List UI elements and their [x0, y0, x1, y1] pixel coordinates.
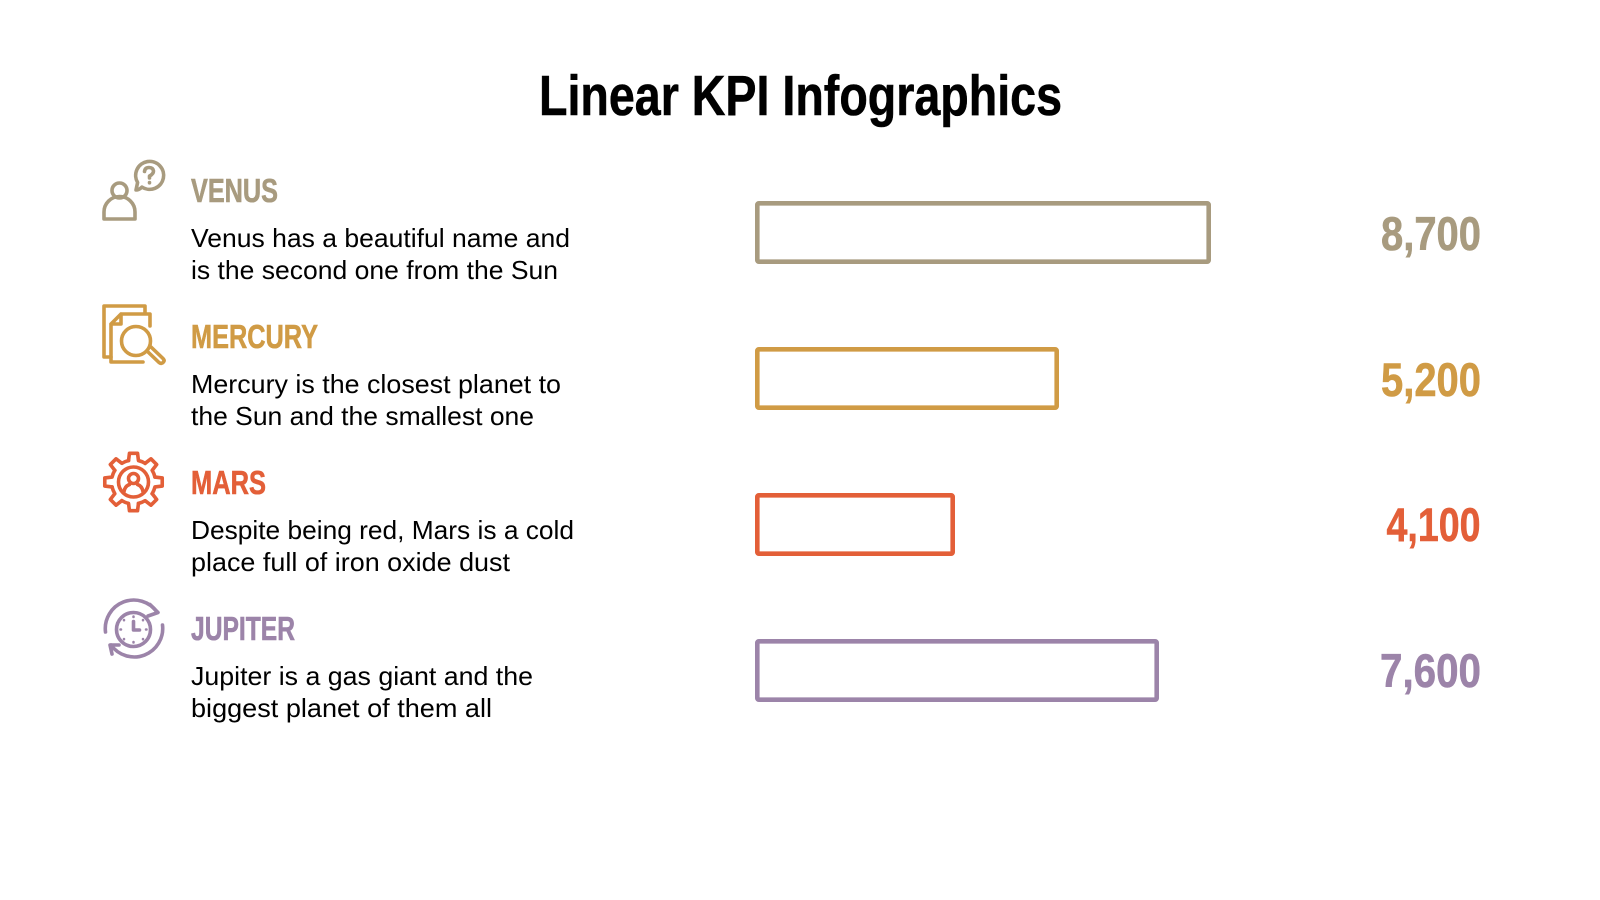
text: Mars description: Despite being red, Mars is a cold [191, 515, 574, 545]
heading: Mars: MARS [191, 464, 266, 501]
value: Mercury: 5,200 [1381, 353, 1481, 406]
icon: clock with circular arrows [105, 600, 163, 657]
panel: Mercury row [104, 306, 1481, 431]
value: Mars: 4,100 [1386, 498, 1480, 551]
panel: Venus row [104, 161, 1481, 285]
panel: Jupiter row [105, 600, 1481, 723]
title: Linear KPI Infographics [539, 64, 1062, 128]
value: Jupiter: 7,600 [1380, 644, 1481, 697]
heading: Mercury: MERCURY [191, 318, 318, 355]
text: Mercury description: the Sun and the smallest one [191, 401, 534, 431]
bar: Mars [757, 495, 953, 554]
value: Venus: 8,700 [1381, 207, 1481, 260]
bar: Venus [757, 203, 1209, 262]
text: Venus description: is the second one from the Sun [191, 255, 558, 285]
icon: gear with person [105, 453, 162, 511]
text: Mercury description: Mercury is the closest planet to [191, 369, 561, 399]
bar: Mercury [757, 349, 1057, 408]
text: Venus description: Venus has a beautiful name and [191, 223, 570, 253]
text: Jupiter description: biggest planet of them all [191, 693, 492, 723]
icon: person with question bubble [104, 161, 164, 219]
panel: Mars row [105, 453, 1480, 577]
icon: documents with magnifier [104, 306, 164, 363]
heading: Jupiter: JUPITER [191, 610, 295, 647]
bar: Jupiter [757, 641, 1157, 700]
heading: Venus: VENUS [191, 172, 278, 209]
text: Jupiter description: Jupiter is a gas giant and the [191, 661, 533, 691]
text: Mars description: place full of iron oxide dust [191, 547, 511, 577]
